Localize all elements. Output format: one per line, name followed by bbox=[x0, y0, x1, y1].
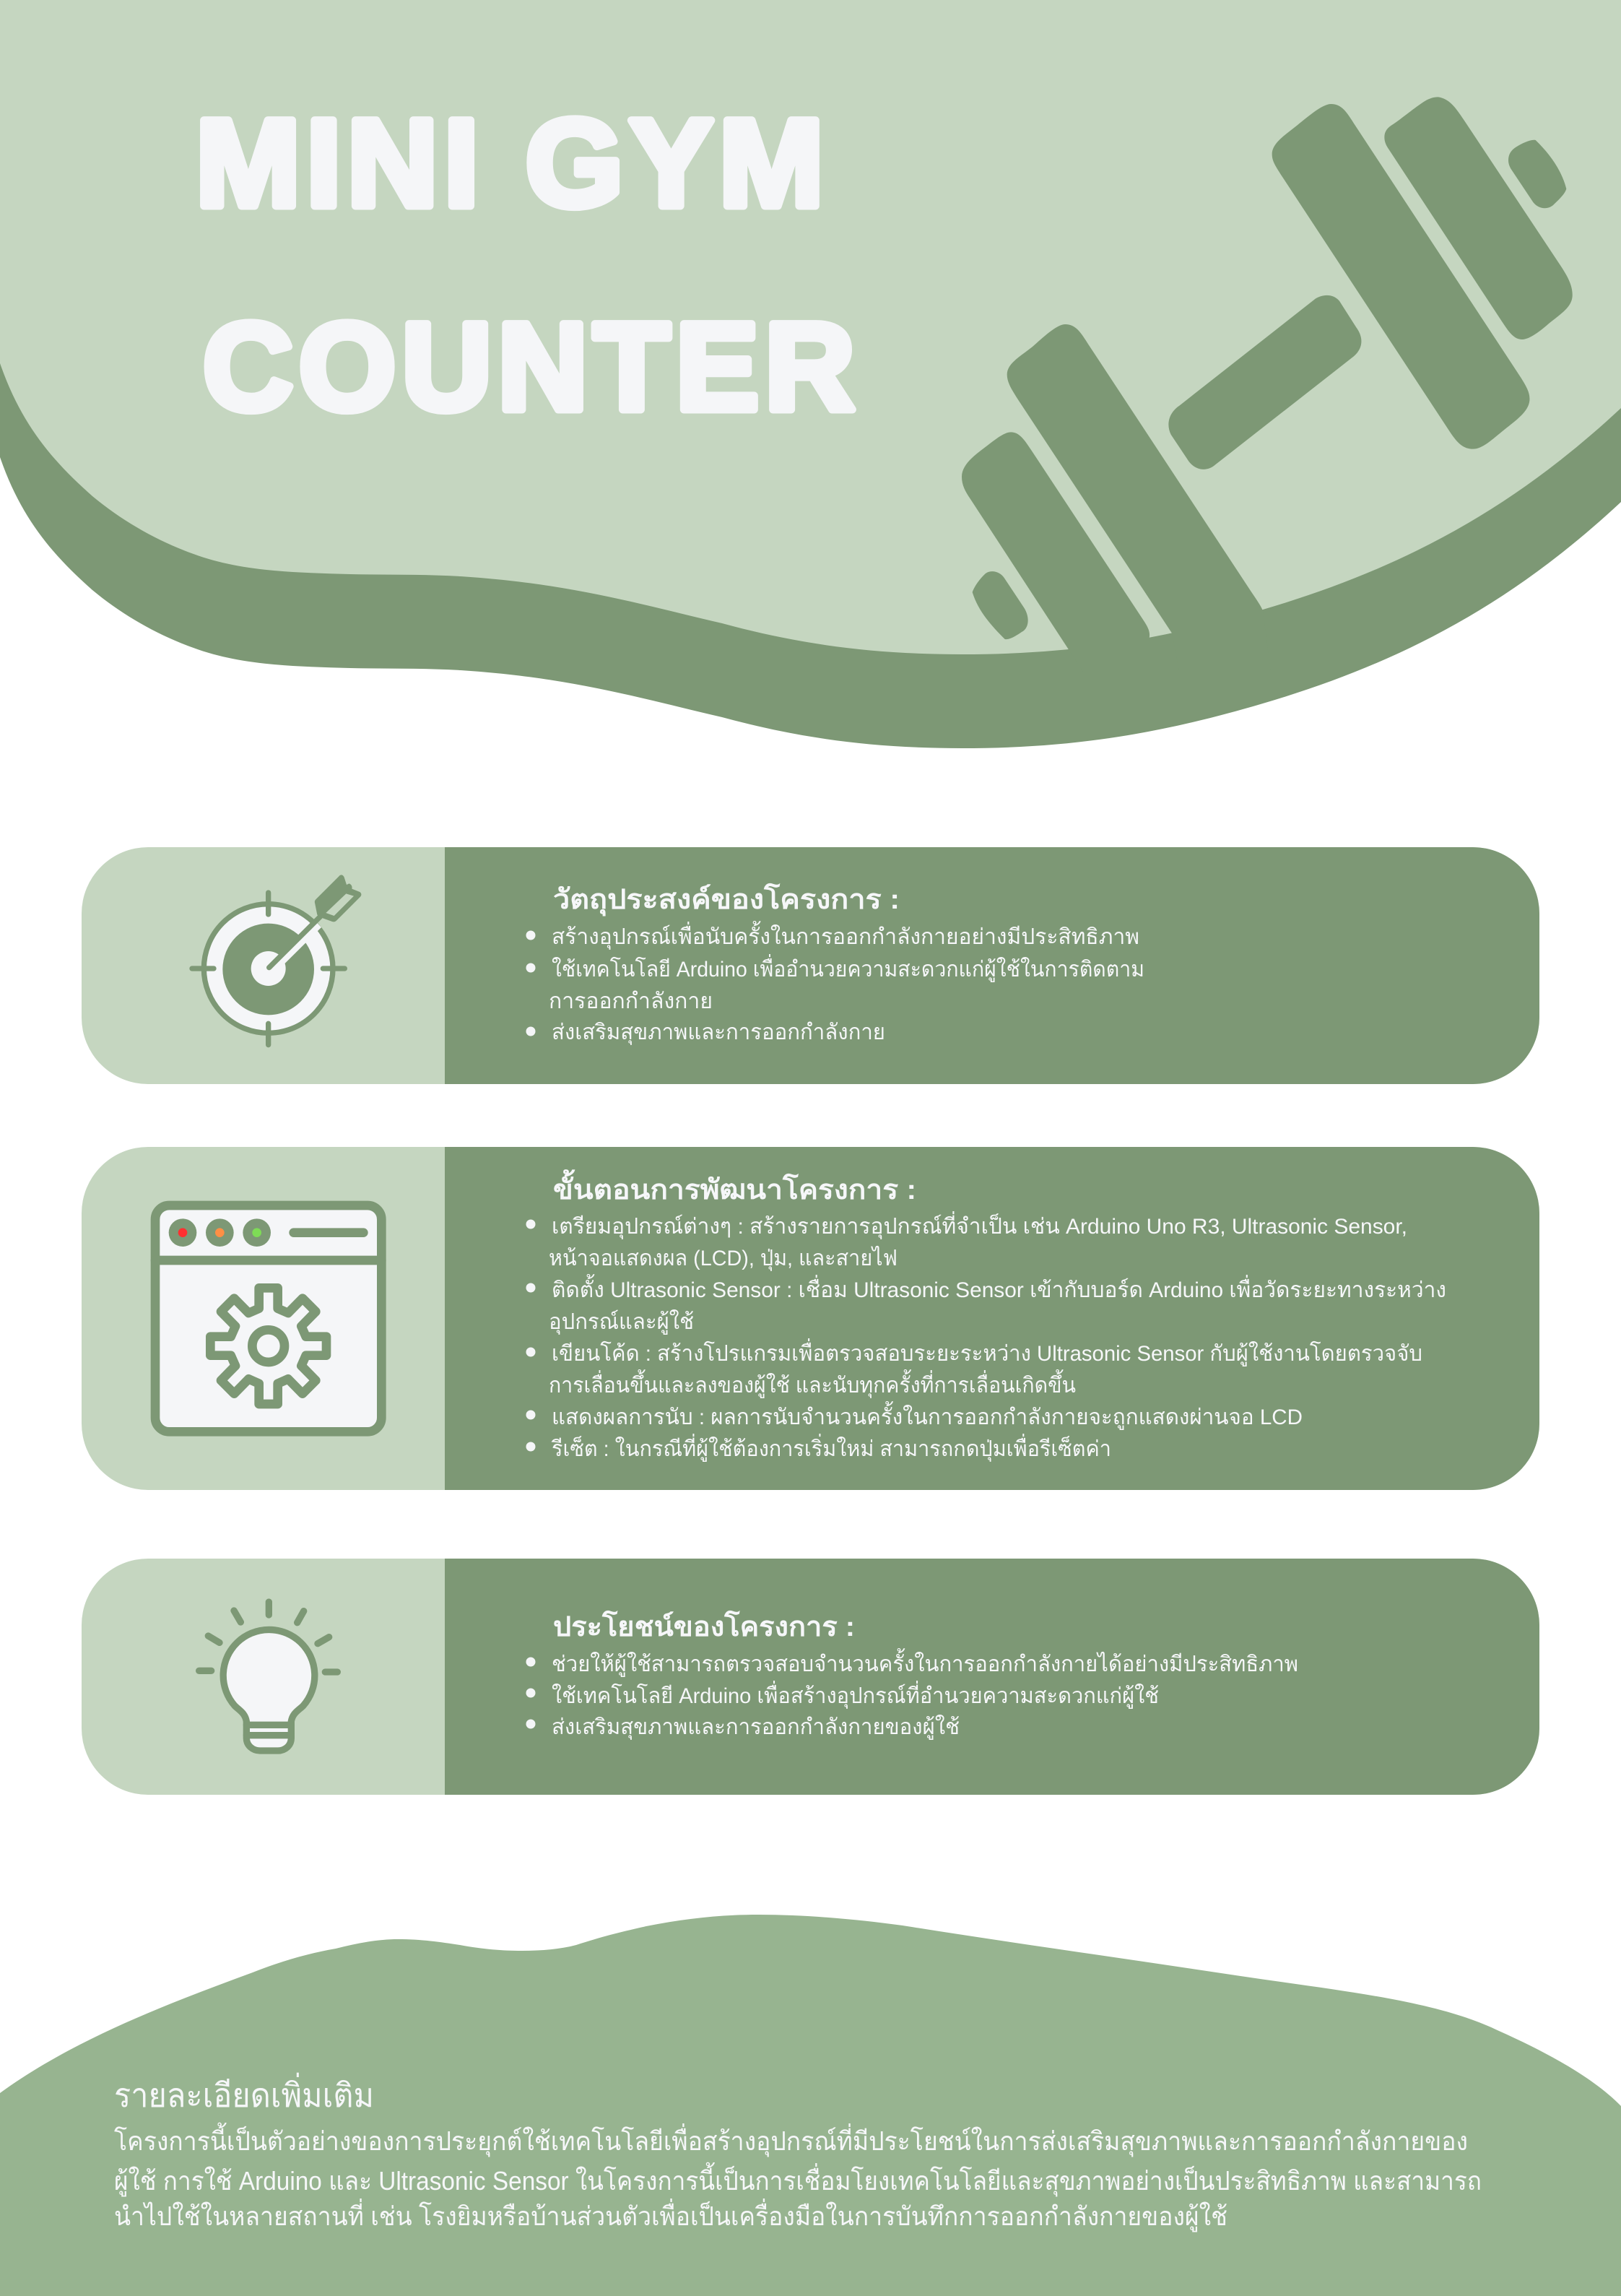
title: MINI GYM bbox=[196, 94, 830, 233]
footer heading: รายละเอียดเพิ่มเติม bbox=[114, 2072, 374, 2114]
title: COUNTER bbox=[203, 298, 861, 436]
header background: light blob bbox=[0, 0, 1621, 654]
footer text block: โครงการนี้เป็นตัวอย่างของการประยุกต์ใช้เทคโนโลยีเพื่อสร้างอุปกรณ์ที่มีประโยชน์ในการส่งเสริมสุขภาพและการออกกำลังกายของ bbox=[114, 2122, 1468, 2157]
list: development steps: เตรียมอุปกรณ์ต่างๆ : สร้างรายการอุปกรณ์ที่จำเป็น เช่น Arduino Uno R3, Ultrasonic Sensor, bbox=[552, 1211, 1407, 1240]
list: objectives: การออกกำลังกาย bbox=[549, 989, 713, 1013]
list: development steps: หน้าจอแสดงผล (LCD), ปุ่ม, และสายไฟ bbox=[549, 1245, 898, 1272]
list: development steps: แสดงผลการนับ : ผลการนับจำนวนครั้งในการออกกำลังกายจะถูกแสดงผ่านจอ LCD bbox=[552, 1401, 1303, 1430]
list: benefits: ช่วยให้ผู้ใช้สามารถตรวจสอบจำนวนครั้งในการออกกำลังกายได้อย่างมีประสิทธิภาพ bbox=[552, 1648, 1298, 1677]
footer text block: นำไปใช้ในหลายสถานที่ เช่น โรงยิมหรือบ้านส่วนตัวเพื่อเป็นเครื่องมือในการบันทึกการออกกำลังกายของผู้ใช้ bbox=[114, 2198, 1227, 2232]
list: development steps: รีเซ็ต : ในกรณีที่ผู้ใช้ต้องการเริ่มใหม่ สามารถกดปุ่มเพื่อรีเซ็ตค่า bbox=[551, 1434, 1111, 1463]
list: development steps: ติดตั้ง Ultrasonic Sensor : เชื่อม Ultrasonic Sensor เข้ากับบอร์ด Arduino เพื่อวัดระยะทางระหว่าง bbox=[552, 1274, 1446, 1302]
list: objectives: ใช้เทคโนโลยี Arduino เพื่ออำนวยความสะดวกแก่ผู้ใช้ในการติดตาม bbox=[552, 954, 1144, 982]
icon: browser window with gear bbox=[155, 1205, 381, 1431]
panel background: objectives bbox=[82, 847, 1539, 1084]
footer text block: ผู้ใช้ การใช้ Arduino และ Ultrasonic Sensor ในโครงการนี้เป็นการเชื่อมโยงเทคโนโลยีและสุขภาพอย่างเป็นประสิทธิภาพ และสามารถ bbox=[114, 2162, 1482, 2197]
heading: objectives: วัตถุประสงค์ของโครงการ : bbox=[553, 883, 900, 917]
list: objectives bbox=[526, 921, 1144, 1046]
panel: benefits bbox=[82, 1559, 1539, 1795]
panel: objectives bbox=[82, 847, 1539, 1084]
list: objectives: ส่งเสริมสุขภาพและการออกกำลังกาย bbox=[552, 1021, 885, 1046]
list: development steps bbox=[526, 1211, 1446, 1463]
icon: dumbbell bbox=[962, 97, 1573, 672]
icon: light bulb bbox=[199, 1602, 337, 1751]
list: development steps: การเลื่อนขึ้นและลงของผู้ใช้ และนับทุกครั้งที่การเลื่อนเกิดขึ้น bbox=[549, 1369, 1076, 1399]
list: objectives: สร้างอุปกรณ์เพื่อนับครั้งในการออกกำลังกายอย่างมีประสิทธิภาพ bbox=[552, 921, 1139, 950]
heading: development steps: ขั้นตอนการพัฒนาโครงการ : bbox=[553, 1169, 916, 1205]
panel: development steps bbox=[82, 1147, 1539, 1490]
list: benefits: ใช้เทคโนโลยี Arduino เพื่อสร้างอุปกรณ์ที่อำนวยความสะดวกแก่ผู้ใช้ bbox=[552, 1681, 1159, 1710]
icon: target with arrow bbox=[192, 875, 361, 1045]
heading: benefits: ประโยชน์ของโครงการ : bbox=[553, 1610, 855, 1642]
list: development steps: เขียนโค้ด : สร้างโปรแกรมเพื่อตรวจสอบระยะระหว่าง Ultrasonic Sensor กับผู้ใช้งานโดยตรวจจับ bbox=[552, 1338, 1422, 1366]
title bbox=[196, 94, 861, 436]
panel background: benefits bbox=[82, 1559, 1539, 1795]
footer: background blob bbox=[0, 1915, 1621, 2296]
footer text block bbox=[114, 2122, 1482, 2232]
panel background: development steps bbox=[82, 1147, 1539, 1490]
list: benefits bbox=[526, 1648, 1298, 1741]
list: development steps: อุปกรณ์และผู้ใช้ bbox=[549, 1309, 694, 1335]
list: benefits: ส่งเสริมสุขภาพและการออกกำลังกายของผู้ใช้ bbox=[552, 1715, 960, 1741]
header background: dark blob shadow bbox=[0, 94, 1621, 748]
